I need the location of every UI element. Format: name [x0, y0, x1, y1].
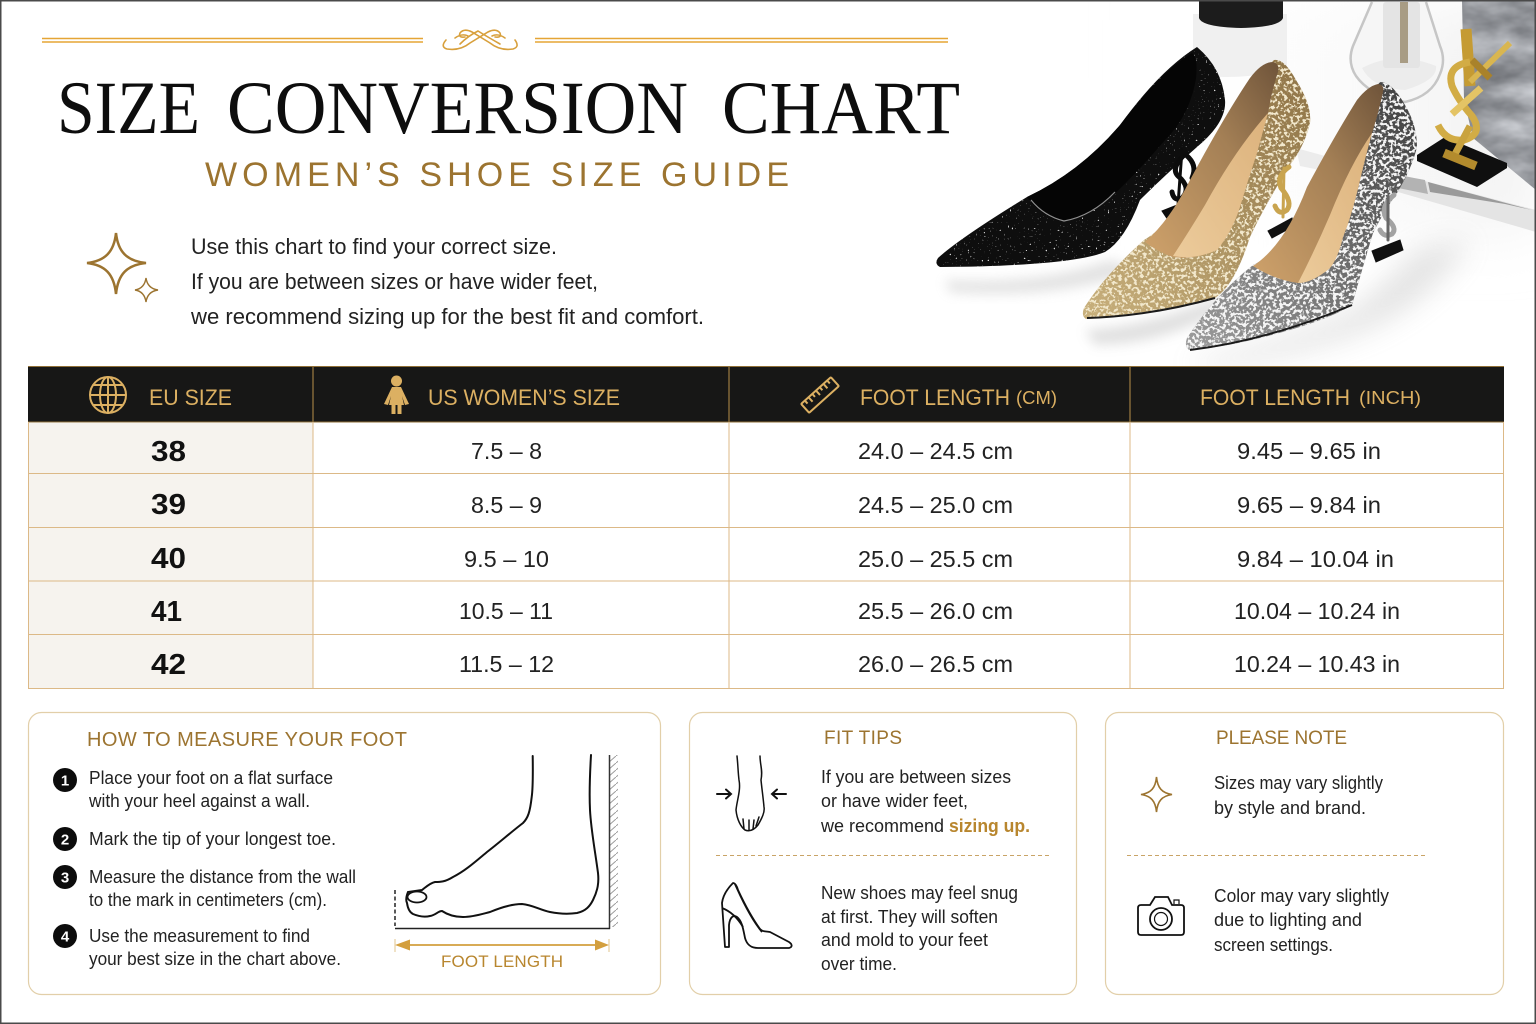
fit tip text 1	[820, 767, 1030, 836]
gold monogram sculpture	[1417, 29, 1510, 187]
shoe: gold glitter pump	[1083, 60, 1310, 319]
row 38: 24.0 – 24.5 cm	[858, 438, 1013, 464]
note text 2: Color may vary slightly	[1214, 886, 1389, 906]
step 1: 1	[61, 772, 69, 790]
panel heading: FIT TIPS	[824, 728, 902, 749]
header: EU size: EU SIZE	[149, 385, 232, 410]
icon: foot top view with arrows	[717, 756, 786, 831]
row 38: 38	[151, 436, 186, 468]
label: foot length: FOOT LENGTH	[441, 952, 563, 971]
subtitle: WOMEN’S SHOE SIZE GUIDE	[205, 156, 789, 194]
EU column shading	[28, 423, 313, 689]
icon: camera	[1138, 897, 1184, 935]
intro text: If you are between sizes or have wider feet,	[191, 269, 598, 294]
icon: high heel	[722, 883, 792, 948]
note text 2: screen settings.	[1214, 935, 1333, 955]
top ornament rule	[42, 30, 948, 49]
note text 1	[1214, 773, 1383, 818]
step 4	[53, 924, 341, 969]
header: foot length inch: (INCH)	[1359, 388, 1421, 408]
table grid	[28, 422, 1504, 689]
row 42: 26.0 – 26.5 cm	[858, 651, 1013, 677]
panel heading: HOW TO MEASURE YOUR FOOT	[87, 729, 407, 751]
row 42: 42	[151, 649, 186, 681]
row 40: 40	[151, 543, 186, 575]
black monogram heel	[1162, 150, 1194, 220]
row 41: 10.04 – 10.24 in	[1234, 598, 1400, 624]
fit tip text 2: over time.	[821, 954, 897, 974]
step 3	[53, 865, 356, 910]
row 39: 39	[151, 489, 186, 521]
header: foot length cm: FOOT LENGTH	[860, 385, 1010, 410]
step 4: Use the measurement to find	[89, 926, 310, 946]
step 2: 2	[61, 832, 69, 848]
row 39	[151, 489, 1381, 521]
note text 1: by style and brand.	[1214, 798, 1366, 818]
silver monogram heel	[1372, 195, 1403, 262]
fit tip text 2: and mold to your feet	[821, 930, 988, 950]
fit tip text 2: at first. They will soften	[821, 907, 998, 927]
fit tip text 2: New shoes may feel snug	[821, 883, 1018, 903]
shoe: silver textured pump	[1186, 82, 1417, 350]
acrylic block	[1296, 148, 1536, 232]
size conversion table	[28, 366, 1504, 689]
row 42: 10.24 – 10.43 in	[1234, 651, 1400, 677]
table header	[28, 366, 1504, 422]
row 40	[151, 543, 1394, 575]
icon: sparkle	[1141, 777, 1172, 812]
panel: fit tips	[690, 712, 1076, 994]
step 4: 4	[61, 928, 70, 946]
row 40: 25.0 – 25.5 cm	[858, 546, 1013, 572]
icon: ruler	[801, 377, 839, 413]
row 41: 25.5 – 26.0 cm	[858, 598, 1013, 624]
row 42: 11.5 – 12	[459, 651, 554, 677]
step 3: 3	[61, 870, 69, 886]
row 38: 7.5 – 8	[471, 438, 542, 464]
row 40: 9.84 – 10.04 in	[1237, 546, 1394, 572]
row 42	[151, 649, 1400, 681]
header: foot length inch: FOOT LENGTH	[1200, 385, 1350, 410]
title: CONVERSION	[227, 67, 688, 150]
panel: how to measure your foot	[28, 712, 660, 994]
step 3: to the mark in centimeters (cm).	[89, 890, 327, 910]
row 41	[151, 596, 1400, 628]
panel heading: PLEASE NOTE	[1216, 728, 1347, 749]
icon: sparkle stars	[87, 233, 158, 302]
shoe: black glitter pump	[936, 47, 1225, 267]
step 2: Mark the tip of your longest toe.	[89, 829, 336, 849]
photo: luxury heels on white table	[936, 0, 1536, 368]
row 41: 41	[151, 596, 182, 628]
title: CHART	[722, 67, 960, 150]
row 38: 9.45 – 9.65 in	[1237, 438, 1381, 464]
header: foot length cm: (CM)	[1016, 388, 1057, 408]
panel: please note	[1106, 712, 1504, 994]
step 4: your best size in the chart above.	[89, 949, 341, 969]
note text 1: Sizes may vary slightly	[1214, 773, 1383, 793]
fit tip text 1: sizing up.	[949, 816, 1030, 836]
black cylinder prop	[1193, 0, 1287, 77]
header: US women's size: US WOMEN’S SIZE	[428, 385, 620, 410]
note text 2: due to lighting and	[1214, 910, 1362, 930]
flourish	[443, 30, 517, 49]
fit tip text 1: we recommend	[820, 816, 944, 836]
step 1: with your heel against a wall.	[88, 791, 310, 811]
row 40: 9.5 – 10	[464, 546, 549, 572]
gold monogram heel	[1268, 167, 1294, 238]
fit tip text 1: If you are between sizes	[821, 767, 1011, 787]
intro text: Use this chart to find your correct size.	[191, 234, 557, 259]
row 41: 10.5 – 11	[459, 598, 553, 624]
title	[57, 67, 960, 150]
intro text	[190, 234, 704, 329]
title: SIZE	[57, 67, 200, 150]
row 39: 8.5 – 9	[471, 492, 542, 518]
perfume bottle	[1351, 2, 1443, 102]
icon: woman figure	[384, 376, 409, 414]
marble panel	[1462, 0, 1536, 190]
row 39: 9.65 – 9.84 in	[1237, 492, 1381, 518]
row 38	[151, 436, 1381, 468]
note text 2	[1214, 886, 1389, 955]
row 39: 24.5 – 25.0 cm	[858, 492, 1013, 518]
fit tip text 1: or have wider feet,	[821, 791, 968, 811]
diagram: foot against wall	[395, 755, 618, 971]
step 1: Place your foot on a flat surface	[89, 768, 333, 788]
step 3: Measure the distance from the wall	[89, 867, 356, 887]
step 1	[53, 768, 333, 811]
intro text: we recommend sizing up for the best fit and comfort.	[190, 304, 704, 329]
fit tip text 2	[821, 883, 1018, 974]
shoe shadows	[945, 240, 1470, 368]
icon: globe	[90, 377, 126, 413]
arrow: foot length	[395, 939, 609, 952]
